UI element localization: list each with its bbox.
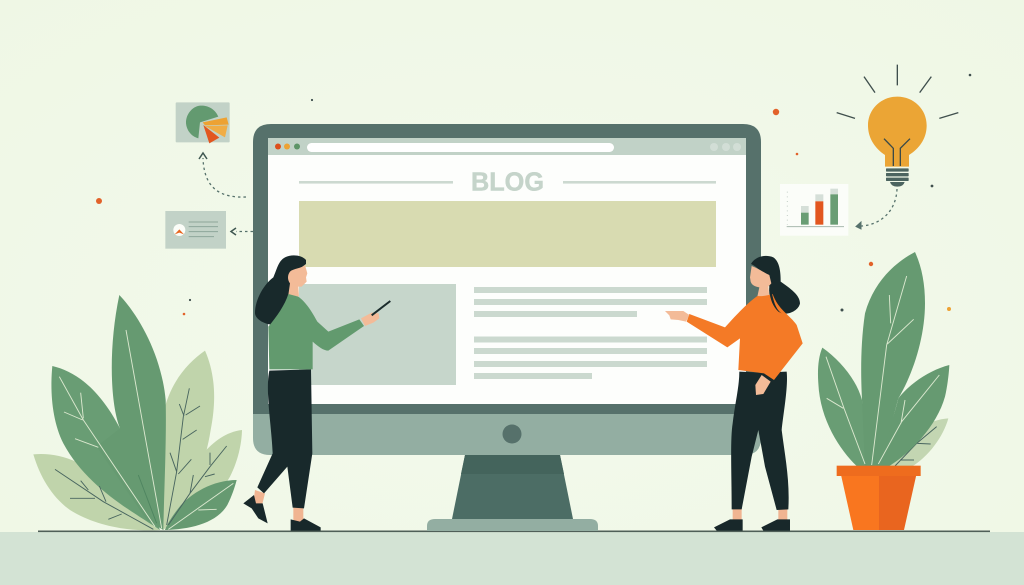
veins	[826, 276, 939, 465]
left leaf	[818, 348, 867, 467]
right leaf	[878, 365, 949, 467]
left plant	[33, 295, 242, 530]
pot	[837, 466, 921, 530]
monitor	[253, 124, 761, 531]
right pale leaf	[165, 430, 242, 530]
glass	[868, 97, 927, 167]
icon: text card	[165, 211, 226, 249]
icon: pie chart card	[176, 102, 230, 143]
pale leaf	[888, 418, 948, 467]
shoes	[714, 519, 790, 531]
far left pale leaf	[33, 454, 160, 530]
left green leaf	[51, 366, 160, 530]
leaf veins	[59, 330, 233, 529]
browser bar	[268, 138, 746, 155]
text lines	[474, 287, 707, 379]
arrowhead	[856, 222, 861, 229]
hair	[751, 256, 800, 314]
rays	[837, 65, 958, 118]
woman in green	[243, 255, 390, 531]
screen	[268, 138, 746, 404]
monitor stand	[427, 455, 598, 531]
image placeholder	[299, 284, 456, 385]
hand	[361, 313, 379, 326]
trousers	[731, 372, 789, 510]
arrow to text card	[236, 230, 253, 232]
potted plant	[818, 252, 949, 530]
sweater	[687, 294, 803, 380]
arrowhead	[231, 228, 236, 235]
filament	[884, 139, 910, 166]
legs skin	[253, 490, 303, 522]
hair back	[255, 255, 306, 325]
base	[886, 168, 909, 187]
pointing hand	[665, 311, 689, 322]
tall green leaf	[97, 295, 166, 530]
arrow to pie chart card	[203, 158, 246, 197]
ankles	[733, 507, 787, 522]
power button	[502, 424, 522, 444]
icon: bar chart card	[780, 184, 848, 236]
arrow from bulb to chart	[861, 189, 897, 226]
tall pale leaf	[161, 351, 214, 530]
woman in orange	[665, 256, 803, 531]
ground	[0, 530, 1024, 585]
shoes	[243, 495, 321, 531]
hip hand	[755, 375, 771, 395]
icon: light bulb	[837, 65, 958, 187]
tall center leaf	[861, 252, 925, 467]
banner	[299, 201, 716, 267]
phone	[372, 301, 390, 315]
front right leaf	[165, 480, 237, 530]
face	[750, 266, 771, 297]
sweater	[268, 294, 364, 369]
dark twigs	[55, 388, 227, 529]
arrowhead	[199, 153, 207, 159]
blog heading: BLOG	[471, 166, 544, 196]
monitor chin	[253, 400, 761, 455]
face	[288, 265, 307, 297]
twig	[895, 427, 937, 466]
monitor bezel	[253, 124, 761, 414]
trousers	[257, 369, 312, 508]
hair over shoulder	[769, 290, 782, 313]
decorative dots	[96, 74, 971, 315]
